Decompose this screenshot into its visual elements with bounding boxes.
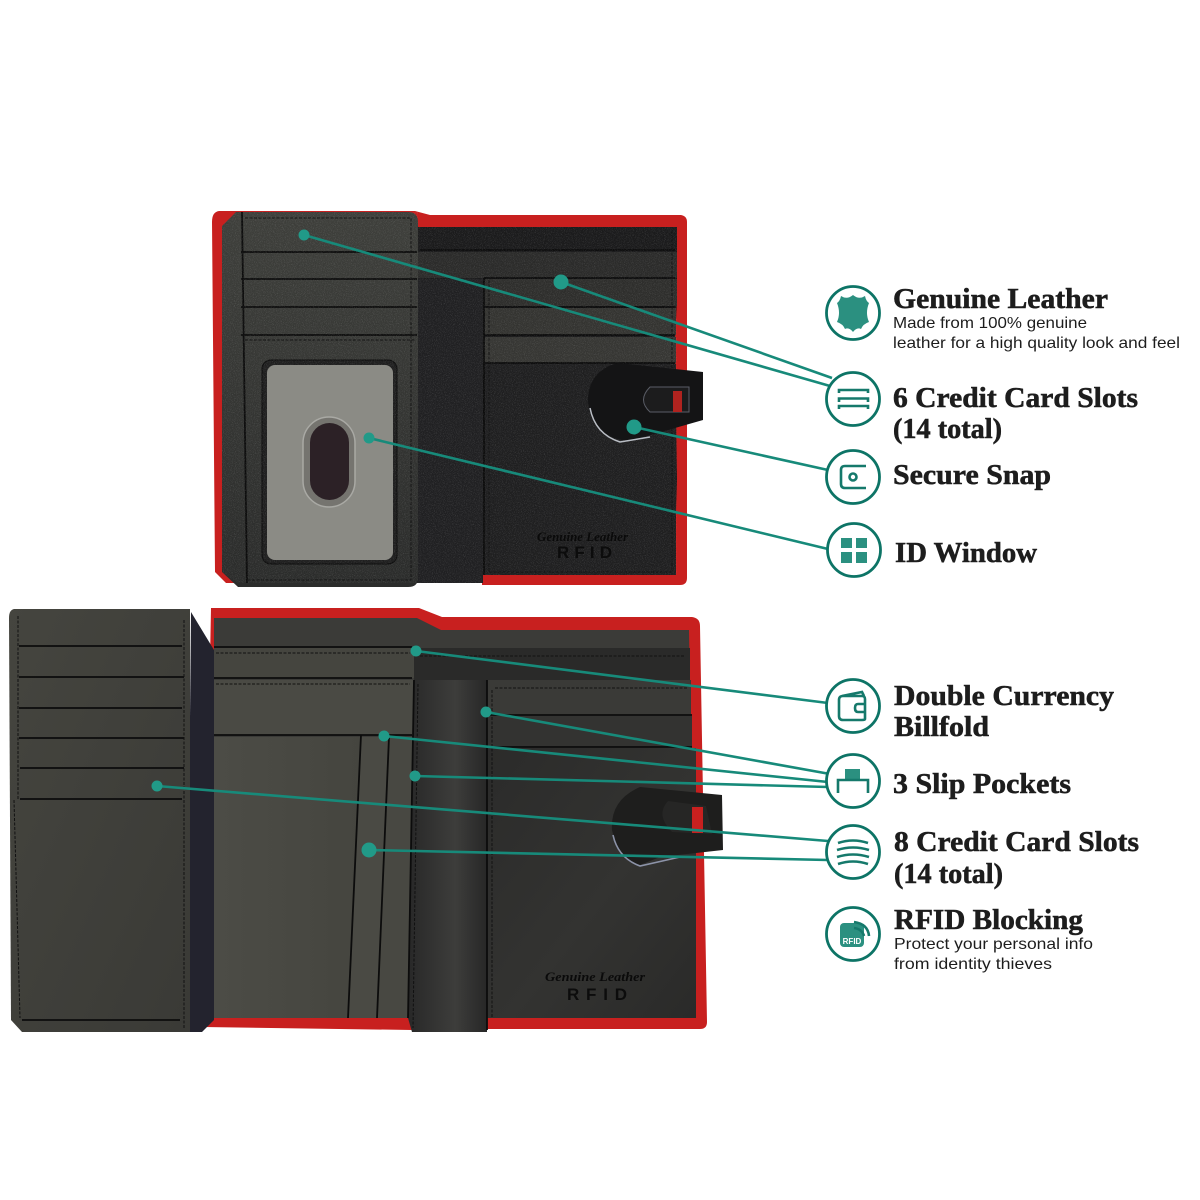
ID window card (267, 365, 393, 560)
heading: RFID Blocking (894, 904, 1083, 936)
red outer shell, bottom wallet (203, 608, 707, 1032)
callout: secure snap (626, 420, 828, 470)
heading: ID Window (895, 537, 1037, 569)
icon: RFID card: RFID (843, 937, 862, 946)
feature: 6 credit card slots (826, 372, 1138, 445)
heading: Genuine Leather (893, 283, 1108, 315)
icon: snap wallet (826, 450, 880, 504)
callout: ID window (364, 432, 828, 549)
navy gusset (187, 612, 214, 1032)
icon: four squares (828, 524, 880, 576)
icon: leather hide (826, 286, 880, 340)
red outer shell, top wallet (212, 211, 687, 585)
callout: left slots (152, 780, 828, 841)
heading: 8 Credit Card Slots (894, 826, 1139, 858)
snap strap, top wallet (588, 363, 703, 442)
callout lines and dots (152, 230, 832, 860)
callout: billfold (410, 646, 828, 703)
left flap, top wallet (222, 212, 418, 587)
left flap, bottom wallet (9, 609, 190, 1032)
embossed logo, bottom wallet: Genuine Leather (545, 969, 646, 984)
subheading: (14 total) (893, 413, 1002, 445)
feature: RFID blocking (826, 904, 1093, 973)
description: from identity thieves (894, 956, 1052, 973)
embossed logo, top wallet: Genuine Leather (537, 529, 629, 544)
embossed logo, bottom wallet: RFID (567, 985, 627, 1004)
feature: secure snap (826, 450, 1051, 504)
subheading: (14 total) (894, 858, 1003, 890)
description: Protect your personal info (894, 936, 1093, 953)
heading: Billfold (894, 711, 989, 743)
upper card slots, top wallet right (418, 230, 677, 575)
right interior, bottom wallet (214, 618, 696, 1018)
heading: 3 Slip Pockets (893, 768, 1071, 800)
snap strap, bottom wallet (612, 787, 723, 866)
callout: slip pocket one (480, 706, 830, 774)
callout: slip pocket two (378, 730, 828, 782)
feature: double currency billfold (826, 680, 1115, 743)
feature: 3 slip pockets (826, 754, 1071, 808)
icon: slip pocket (826, 754, 880, 808)
icon: stacked slots (826, 826, 880, 878)
heading: Double Currency (894, 680, 1115, 712)
embossed logo, bottom wallet (545, 969, 646, 1004)
callout: lower slots (362, 842, 828, 860)
heading: 6 Credit Card Slots (893, 382, 1138, 414)
embossed logo, top wallet: RFID (557, 543, 612, 562)
feature: genuine leather (826, 283, 1180, 352)
bottom wallet photo (9, 608, 723, 1032)
spine, top wallet (418, 279, 483, 583)
callout: slip pocket three (410, 770, 828, 787)
icon: card slots (826, 372, 880, 426)
feature: 8 credit card slots (826, 826, 1139, 890)
heading: Secure Snap (893, 459, 1051, 491)
center flap, bottom wallet (408, 680, 492, 1032)
callout: right slots to card slots (554, 274, 832, 378)
top pockets, bottom wallet (214, 647, 696, 1018)
lower slip pockets, bottom wallet (214, 735, 414, 1018)
embossed logo, top wallet (537, 529, 629, 562)
icon: RFID card (826, 908, 880, 960)
description: Made from 100% genuine (893, 315, 1087, 332)
callout: leather flap to card slots (298, 230, 830, 386)
feature: ID window (828, 524, 1037, 576)
icon: billfold wallet (826, 680, 880, 732)
top wallet photo (212, 211, 703, 587)
description: leather for a high quality look and feel (893, 335, 1180, 352)
right interior, top wallet (410, 227, 677, 583)
